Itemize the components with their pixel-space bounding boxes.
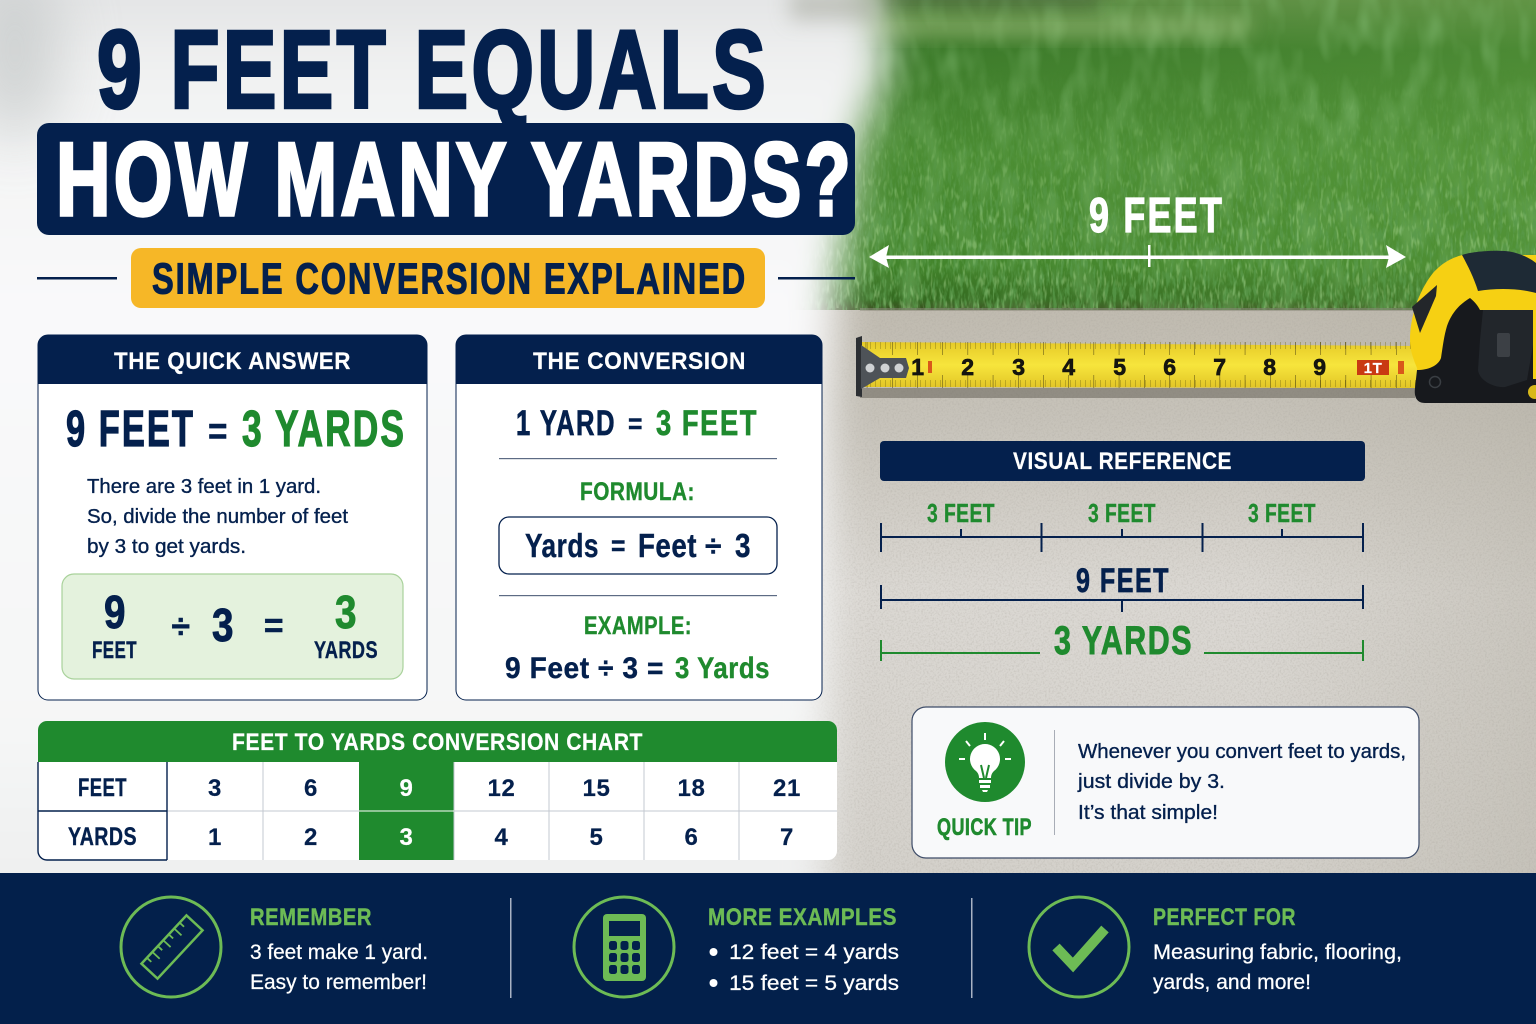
feet row: 15	[583, 775, 610, 802]
feet row: 9	[400, 775, 413, 802]
more examples text: 15 feet = 5 yards	[729, 972, 899, 995]
tape numerals: 1T	[1364, 360, 1382, 377]
scale: 3 yards: 3 YARDS	[1054, 619, 1193, 663]
more examples text: MORE EXAMPLES	[708, 904, 897, 931]
example equation: 3 Yards	[675, 652, 770, 685]
yards row: 5	[590, 824, 603, 851]
conversion fact: =	[628, 408, 643, 439]
icon: ruler	[121, 897, 221, 997]
perfect for text: Measuring fabric, flooring,	[1153, 941, 1402, 964]
conversion fact	[516, 404, 758, 443]
footer band	[0, 873, 1536, 1024]
subtitle banner: SIMPLE CONVERSION EXPLAINED	[152, 254, 747, 304]
panel: visual reference	[880, 441, 1365, 663]
icon: calculator	[574, 897, 674, 997]
subtitle banner	[37, 248, 855, 308]
yards row: 3	[400, 824, 413, 851]
yards row	[68, 823, 794, 851]
tape numerals: 2	[961, 354, 975, 380]
explanation text: There are 3 feet in 1 yard.	[87, 475, 321, 498]
panel: the conversion	[456, 335, 822, 700]
tape shadow	[860, 388, 1415, 398]
perfect for text	[1153, 904, 1402, 994]
label: 9 FEET over grass: 9 FEET	[1089, 189, 1224, 243]
scale: three 3-foot segments: 3 FEET	[1088, 498, 1156, 528]
formula box: =	[611, 530, 626, 561]
example equation: 9 Feet ÷ 3 =	[505, 652, 664, 685]
feet row: 3	[208, 775, 222, 802]
chart title: FEET TO YARDS CONVERSION CHART	[232, 729, 643, 756]
worked calculation box: 9	[104, 586, 126, 638]
scale: three 3-foot segments	[881, 498, 1363, 552]
tape numerals: 7	[1213, 354, 1227, 380]
title banner: HOW MANY YARDS?: HOW MANY YARDS?	[56, 122, 854, 238]
more examples text: 12 feet = 4 yards	[729, 941, 899, 964]
tape numerals: 9	[1313, 354, 1327, 380]
formula box: ÷	[705, 530, 722, 563]
answer equation: =	[208, 411, 228, 453]
scale: 9 feet: 9 FEET	[1076, 562, 1170, 600]
panel heading: the conversion: THE CONVERSION	[533, 348, 746, 375]
tape blade	[856, 336, 1418, 397]
footer item: remember	[121, 897, 428, 997]
quick tip text	[1077, 740, 1406, 824]
yards row: 4	[495, 824, 509, 851]
arrow: nine-foot span	[869, 245, 1406, 268]
tape case	[1410, 251, 1536, 403]
feet row: 6	[304, 775, 318, 802]
tape numerals: 6	[1163, 354, 1177, 380]
explanation text: by 3 to get yards.	[87, 535, 246, 558]
feet row: 12	[488, 775, 515, 802]
footer item: perfect for	[1029, 897, 1402, 997]
answer equation: 3 YARDS	[242, 400, 406, 457]
tape numerals: 4	[1062, 354, 1076, 380]
worked calculation box: =	[264, 607, 284, 645]
formula label: FORMULA:	[580, 478, 695, 506]
quick tip text: just divide by 3.	[1077, 770, 1225, 793]
yards row: 1	[208, 824, 222, 851]
remember text: 3 feet make 1 yard.	[250, 941, 428, 964]
remember text	[250, 904, 428, 994]
visual reference heading: VISUAL REFERENCE	[1013, 448, 1232, 475]
example label: EXAMPLE:	[584, 612, 692, 640]
scale: 3 yards	[881, 619, 1363, 663]
yards row: YARDS	[68, 823, 137, 851]
perfect for text: yards, and more!	[1153, 971, 1311, 994]
perfect for text: PERFECT FOR	[1153, 904, 1296, 931]
feet row	[78, 774, 801, 802]
formula box	[499, 517, 777, 574]
worked calculation box: FEET	[92, 637, 137, 664]
conversion chart table	[38, 721, 837, 860]
quick tip label: QUICK TIP	[937, 814, 1032, 841]
answer equation: 9 FEET	[66, 400, 195, 457]
icon: light bulb	[945, 722, 1025, 802]
worked calculation box: 3	[212, 599, 234, 651]
panel heading: the quick answer: THE QUICK ANSWER	[114, 348, 351, 375]
yards row: 2	[304, 824, 318, 851]
panel: the quick answer	[38, 335, 427, 700]
quick tip text: Whenever you convert feet to yards,	[1078, 740, 1406, 763]
scale: three 3-foot segments: 3 FEET	[927, 498, 995, 528]
remember text: REMEMBER	[250, 904, 372, 931]
tape measure	[856, 251, 1536, 403]
icon: check mark	[1029, 897, 1129, 997]
worked calculation box: 3	[335, 586, 357, 638]
visual reference heading	[880, 441, 1365, 481]
yards row: 6	[685, 824, 698, 851]
conversion fact: 3 FEET	[656, 404, 758, 443]
feet row: 18	[678, 775, 705, 802]
answer equation	[66, 400, 406, 457]
scale: three 3-foot segments: 3 FEET	[1248, 498, 1316, 528]
worked calculation box: ÷	[171, 608, 191, 646]
tape numerals: 3	[1012, 354, 1026, 380]
yards row: 7	[780, 824, 794, 851]
formula box: 3	[735, 527, 751, 564]
explanation text	[87, 475, 348, 558]
worked calculation box: YARDS	[314, 637, 378, 664]
feet row: FEET	[78, 774, 127, 802]
more examples text	[708, 904, 899, 995]
tape numerals: 8	[1263, 354, 1277, 380]
callout: quick tip	[912, 707, 1419, 858]
tape numerals: 1	[911, 354, 925, 380]
tape numerals	[911, 354, 1382, 380]
example equation	[505, 652, 770, 685]
conversion fact: 1 YARD	[516, 404, 616, 443]
explanation text: So, divide the number of feet	[87, 505, 348, 528]
worked calculation box	[62, 574, 403, 679]
feet row: 21	[773, 775, 801, 802]
footer item: more examples	[574, 897, 899, 997]
formula box: Yards	[525, 527, 599, 564]
quick tip text: It’s that simple!	[1078, 801, 1218, 824]
scale: 9 feet	[881, 562, 1363, 612]
formula box: Feet	[638, 527, 697, 564]
title line: 9 FEET EQUALS: 9 FEET EQUALS	[97, 8, 769, 132]
tape numerals: 5	[1113, 354, 1127, 380]
remember text: Easy to remember!	[250, 971, 427, 994]
